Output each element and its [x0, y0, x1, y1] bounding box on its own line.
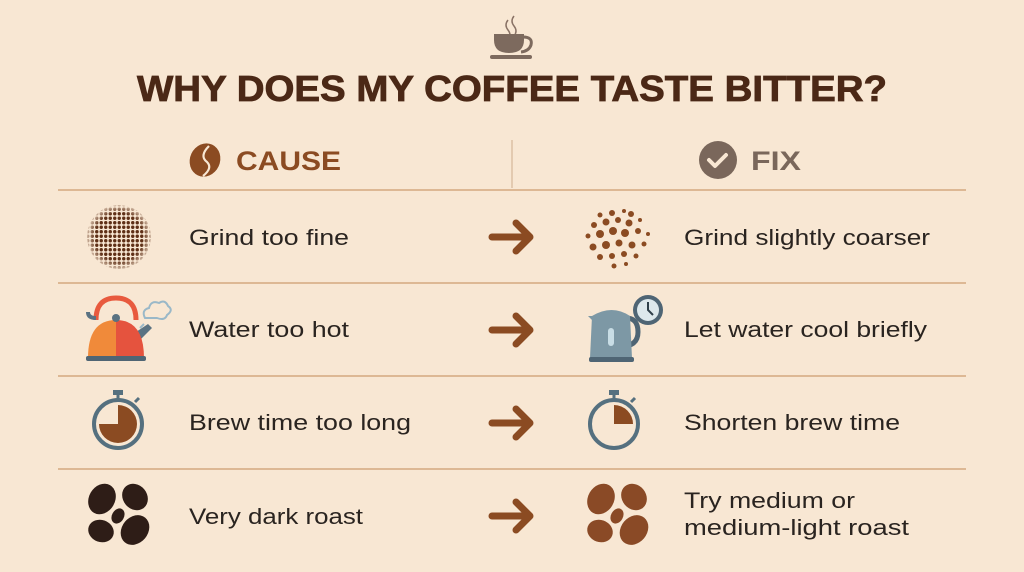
icon: fine grounds: [87, 205, 151, 269]
header: fix: [699, 141, 801, 179]
fix text: Shorten brew time: [684, 410, 900, 435]
icon: medium beans: [582, 479, 654, 551]
fix text: Try medium or: [684, 488, 855, 513]
fix text: [684, 488, 909, 540]
header: cause: [184, 138, 341, 182]
header: fix: FIX: [751, 146, 801, 176]
fix text: Let water cool briefly: [684, 317, 927, 342]
icon: stopwatch long: [94, 390, 142, 448]
icon: stopwatch short: [590, 390, 638, 448]
cause text: Brew time too long: [189, 410, 411, 435]
header: cause: CAUSE: [236, 146, 341, 176]
row 4: roast: [83, 479, 909, 551]
fix text: Grind slightly coarser: [684, 225, 930, 250]
row 3: brew time: [94, 390, 900, 448]
arrow: [492, 502, 530, 530]
cause text: Very dark roast: [189, 504, 363, 529]
fix text: medium-light roast: [684, 515, 909, 540]
arrow: [492, 409, 530, 437]
title: WHY DOES MY COFFEE TASTE BITTER?: [137, 68, 887, 109]
cause text: Water too hot: [189, 317, 349, 342]
row 1: grind: [87, 205, 930, 269]
cause text: Grind too fine: [189, 225, 349, 250]
icon: dark beans: [83, 479, 155, 551]
arrow: [492, 316, 530, 344]
icon: electric kettle with clock: [588, 295, 663, 362]
icon: coarse grounds: [586, 209, 650, 268]
row 2: water: [86, 295, 927, 362]
icon: coffee cup: [490, 16, 532, 59]
icon: kettle: [86, 298, 171, 361]
arrow: [492, 223, 530, 251]
